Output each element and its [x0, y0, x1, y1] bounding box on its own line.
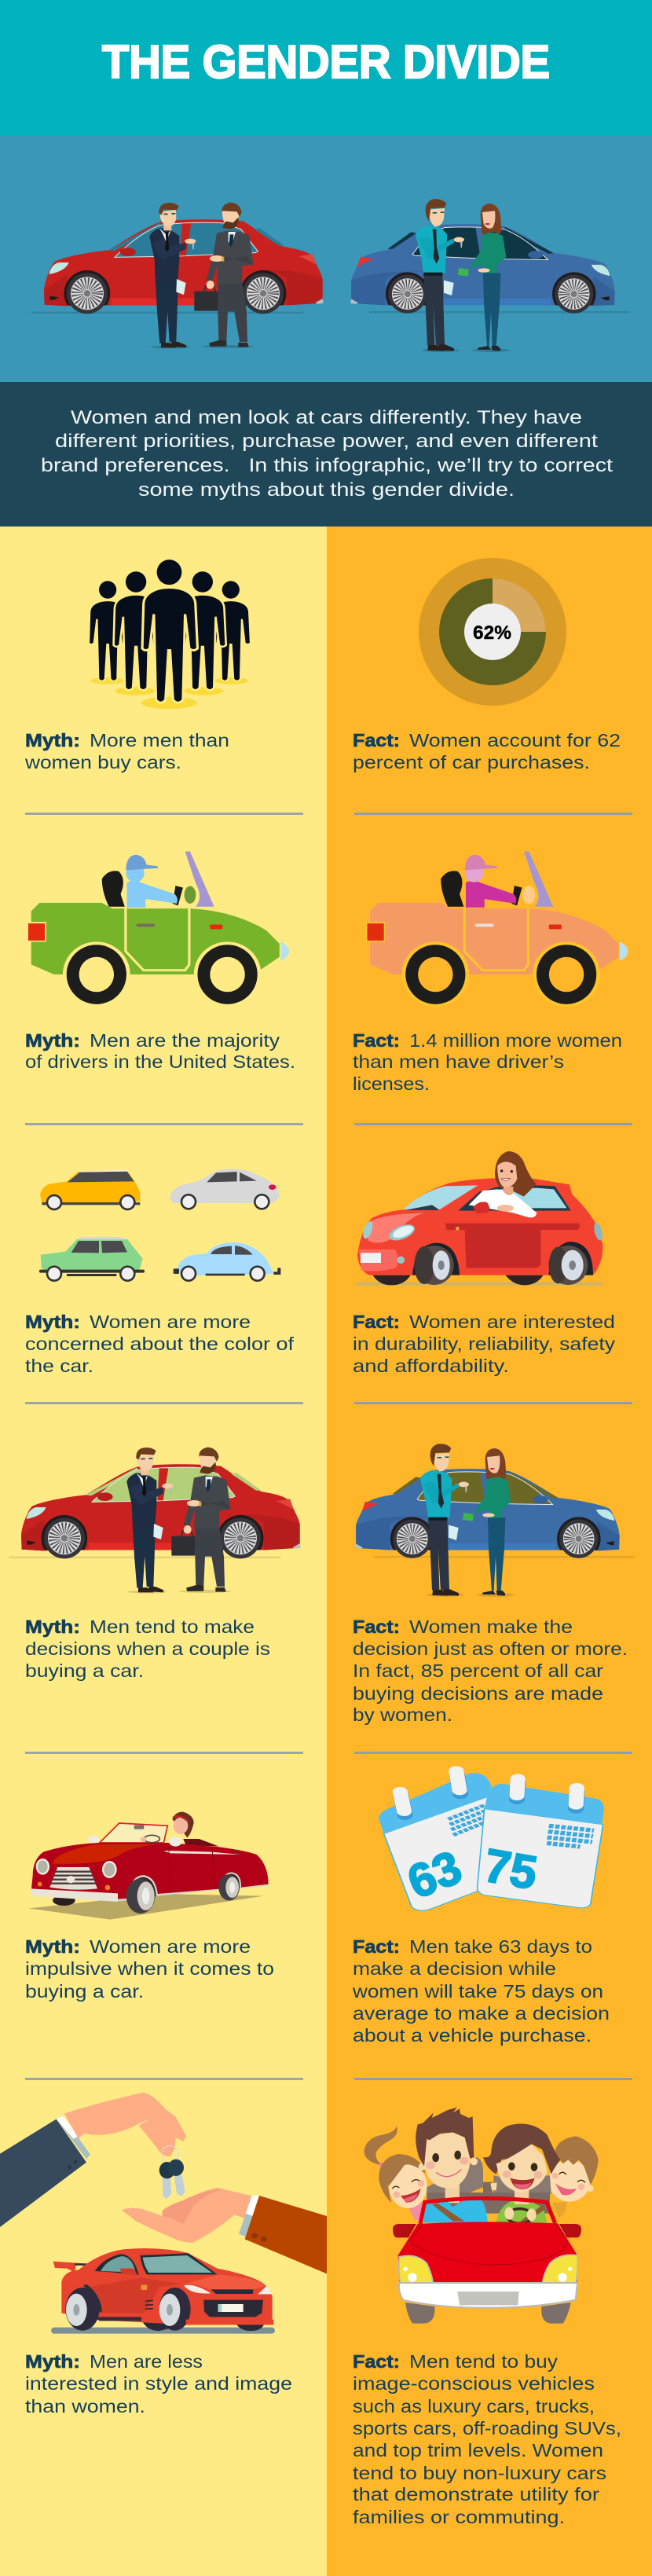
myth 3 text: the car. — [25, 1356, 93, 1376]
icon: four coloured cars — [39, 1169, 280, 1282]
fact 5 text — [352, 1936, 610, 2046]
fact 6 text: and top trim levels. Women — [353, 2440, 603, 2460]
fact 5 text: average to make a decision — [353, 2003, 610, 2024]
fact 5 text: Fact: — [353, 1936, 400, 1957]
fact 4 text: In fact, 85 percent of all car — [353, 1660, 603, 1681]
chart: 62 percent donut — [419, 558, 566, 706]
fact 5 text: make a decision while — [353, 1958, 556, 1979]
myth 2 text: of drivers in the United States. — [25, 1051, 295, 1072]
fact 6 text: Fact: — [353, 2351, 400, 2372]
intro text: some myths about this gender divide. — [138, 479, 515, 501]
fact 4 text: decision just as often or more. — [353, 1638, 628, 1659]
myth 5 text: buying a car. — [25, 1981, 144, 2002]
myth 4 text: decisions when a couple is — [25, 1638, 270, 1659]
title: THE GENDER DIVIDE — [102, 36, 550, 88]
fact 6 text — [353, 2351, 621, 2527]
myth 2 text — [25, 1030, 295, 1072]
icon: green convertible with man driver — [27, 851, 289, 1007]
myth 6 text: Myth: — [25, 2351, 80, 2372]
illustration: salesman and woman with blue car (repeat) — [355, 1444, 635, 1597]
fact 3 text — [353, 1312, 616, 1376]
intro text — [41, 407, 613, 501]
myth 1 text: More men than — [90, 730, 229, 750]
illustration: two calendars 63 and 75: 75 — [480, 1839, 541, 1899]
intro band — [0, 382, 652, 527]
myth 5 text: impulsive when it comes to — [25, 1958, 274, 1979]
fact 6 text: image-conscious vehicles — [353, 2373, 595, 2394]
fact 1 text: Women account for 62 — [409, 730, 621, 750]
fact 6 text: tend to buy non-luxury cars — [353, 2463, 606, 2483]
myth 5 text: Women are more — [90, 1936, 251, 1957]
fact 2 text — [353, 1030, 622, 1094]
fact 1 text: Fact: — [353, 730, 400, 750]
fact 4 text: by women. — [353, 1704, 452, 1725]
intro text: Women and men look at cars differently. They have — [71, 407, 582, 428]
panel: myths column — [0, 527, 327, 2576]
myth 3 text — [25, 1312, 295, 1376]
myth 6 text: interested in style and image — [25, 2373, 292, 2394]
fact 3 text: Women are interested — [409, 1312, 615, 1332]
myth 3 text: Myth: — [25, 1312, 80, 1332]
fact 4 text: Fact: — [353, 1616, 400, 1637]
fact 2 text: 1.4 million more women — [409, 1030, 622, 1051]
fact 6 text: sports cars, off-roading SUVs, — [353, 2418, 621, 2438]
fact 3 text: in durability, reliability, safety — [353, 1334, 616, 1354]
myth 1 text: Myth: — [25, 730, 80, 750]
myth 4 text: Myth: — [25, 1616, 80, 1637]
illustration: two calendars 63 and 75 — [379, 1771, 604, 1910]
fact 2 text: than men have driver’s — [353, 1051, 564, 1072]
fact 1 text — [353, 730, 621, 772]
chart: 62 percent donut: 62% — [473, 622, 511, 644]
fact 4 text: buying decisions are made — [353, 1683, 603, 1704]
myth 1 text — [24, 730, 229, 772]
fact 4 text: Women make the — [409, 1616, 573, 1637]
illustration: two men with red car (repeat) — [9, 1448, 301, 1594]
icon: group of people — [89, 560, 251, 709]
header band — [0, 0, 652, 136]
myth 6 text — [25, 2351, 292, 2416]
hero panel — [0, 136, 652, 382]
fact 5 text: women will take 75 days on — [352, 1981, 603, 2002]
icon: orange convertible with woman driver — [366, 851, 628, 1007]
fact 6 text: Men tend to buy — [409, 2351, 559, 2372]
illustration: woman in red convertible — [29, 1812, 269, 1920]
fact 5 text: about a vehicle purchase. — [353, 2025, 592, 2046]
fact 1 text: percent of car purchases. — [353, 752, 590, 772]
illustration: two calendars 63 and 75: 63 — [401, 1840, 469, 1909]
myth 5 text — [25, 1936, 274, 2002]
myth 3 text: Women are more — [90, 1312, 251, 1332]
intro text: different priorities, purchase power, and even different — [55, 431, 598, 452]
fact 3 text: Fact: — [353, 1312, 400, 1332]
myth 2 text: Myth: — [25, 1030, 80, 1051]
illustration: family in red car — [364, 2108, 599, 2324]
myth 4 text: buying a car. — [25, 1660, 144, 1681]
dividers — [25, 813, 632, 2080]
fact 4 text — [353, 1616, 628, 1725]
fact 6 text: such as luxury cars, trucks, — [353, 2396, 595, 2416]
myth 6 text: than women. — [25, 2396, 145, 2416]
fact 6 text: that demonstrate utility for — [353, 2484, 599, 2504]
myth 1 text: women buy cars. — [24, 752, 181, 772]
illustration: salesman and woman with blue car — [350, 199, 630, 352]
myth 4 text — [25, 1616, 270, 1681]
intro text: brand preferences. In this infographic, we’ll try to correct — [41, 455, 613, 476]
fact 2 text: licenses. — [353, 1073, 430, 1094]
myth 5 text: Myth: — [25, 1936, 80, 1957]
illustration: two men with red car — [31, 203, 324, 349]
illustration: hands passing keys above red sports car — [0, 2093, 327, 2334]
myth 6 text: Men are less — [90, 2351, 203, 2372]
fact 6 text: families or commuting. — [353, 2507, 565, 2527]
fact 5 text: Men take 63 days to — [409, 1936, 592, 1957]
fact 2 text: Fact: — [353, 1030, 400, 1051]
illustration: woman in red hatchback — [356, 1151, 604, 1286]
myth 2 text: Men are the majority — [90, 1030, 280, 1051]
panel: facts column — [327, 527, 652, 2576]
myth 3 text: concerned about the color of — [25, 1334, 295, 1354]
fact 3 text: and affordability. — [353, 1356, 509, 1376]
myth 4 text: Men tend to make — [90, 1616, 255, 1637]
